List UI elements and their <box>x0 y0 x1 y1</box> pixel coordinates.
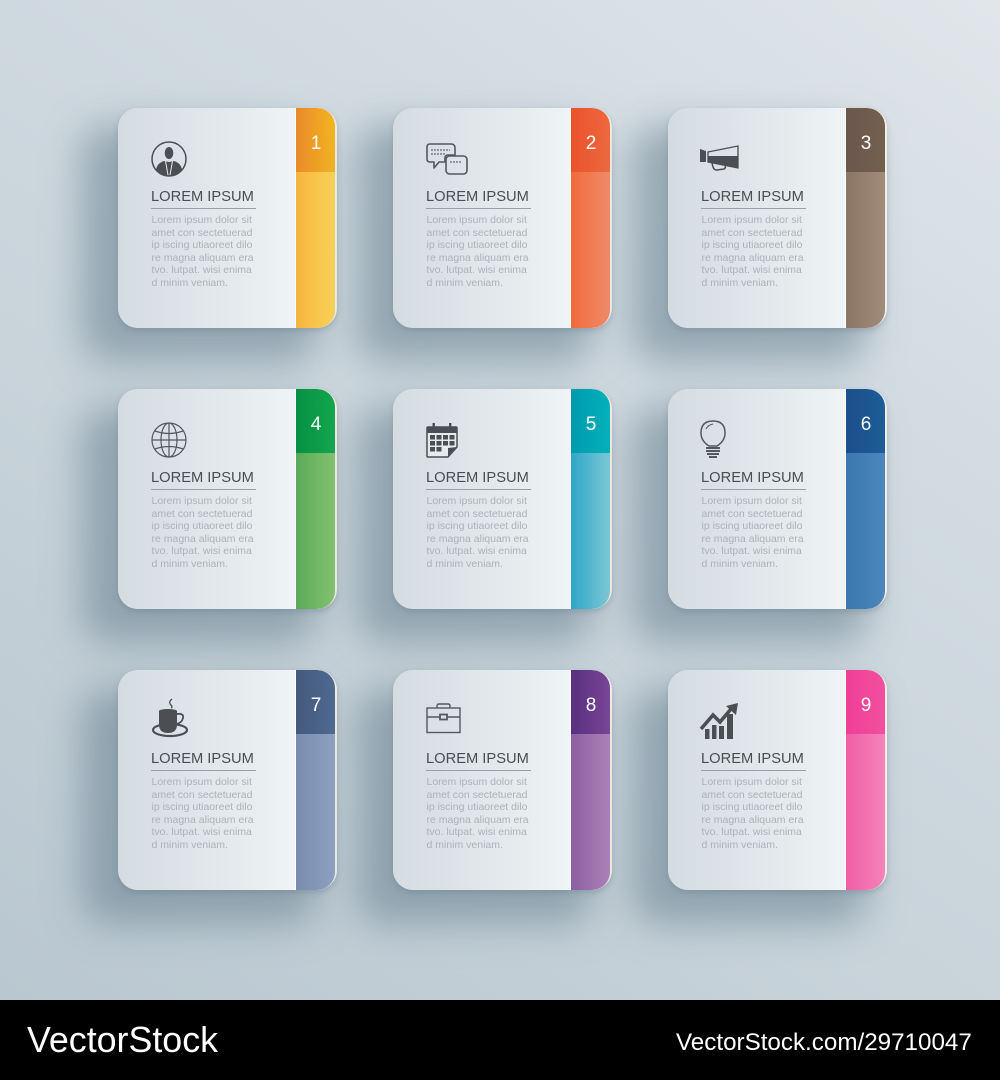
text block: Lorem ipsum dolor sit <box>426 776 527 788</box>
number 9 <box>846 670 885 734</box>
text block <box>426 776 529 850</box>
number 2 <box>571 108 610 172</box>
panel: card 3 <box>668 108 887 328</box>
text block: ip iscing utiaoreet dilo <box>426 239 527 251</box>
number 1: 1 <box>311 133 321 154</box>
text block: re magna aliquam era <box>152 532 254 544</box>
text block <box>152 776 254 850</box>
panel: card 2 <box>393 108 612 328</box>
heading: LOREM IPSUM <box>426 751 529 767</box>
text block: ip iscing utiaoreet dilo <box>702 801 802 813</box>
text block <box>702 495 804 570</box>
panel: card 6 <box>668 389 887 609</box>
icon: megaphone <box>700 145 739 171</box>
text block: d minim veniam. <box>702 838 778 850</box>
text block: d minim veniam. <box>152 276 228 288</box>
image reference: VectorStock.com/29710047 <box>676 1029 972 1056</box>
number 1 <box>296 108 335 172</box>
text block <box>426 495 529 570</box>
icon: businessman <box>151 141 187 177</box>
text block: amet con sectetuerad <box>702 788 802 800</box>
number 8 <box>571 670 610 734</box>
text block: re magna aliquam era <box>702 532 804 544</box>
number 4 <box>296 389 335 453</box>
text block: tvo. lutpat. wisi enima <box>702 545 802 557</box>
icon: growth chart <box>700 703 738 739</box>
heading: LOREM IPSUM <box>701 189 804 205</box>
text block: tvo. lutpat. wisi enima <box>426 264 527 276</box>
text block: d minim veniam. <box>152 838 228 850</box>
text block: Lorem ipsum dolor sit <box>152 495 252 507</box>
text block <box>702 776 804 850</box>
heading: LOREM IPSUM <box>151 751 254 767</box>
text block: d minim veniam. <box>426 558 503 570</box>
number 6: 6 <box>861 414 871 435</box>
number 2: 2 <box>586 133 596 154</box>
text block: ip iscing utiaoreet dilo <box>426 801 527 813</box>
text block: d minim veniam. <box>702 276 778 288</box>
text block: amet con sectetuerad <box>152 508 252 520</box>
text block: Lorem ipsum dolor sit <box>702 495 802 507</box>
icon: light bulb <box>700 420 726 458</box>
icon: globe <box>151 422 187 458</box>
number 9: 9 <box>861 695 871 716</box>
number 3 <box>846 108 885 172</box>
text block <box>702 214 804 288</box>
text block: Lorem ipsum dolor sit <box>702 214 802 226</box>
text block: amet con sectetuerad <box>702 226 802 238</box>
text block <box>152 495 254 570</box>
icon: calendar <box>426 423 458 458</box>
heading: LOREM IPSUM <box>151 470 254 486</box>
heading: LOREM IPSUM <box>151 189 254 205</box>
text block: d minim veniam. <box>152 558 228 570</box>
icon: coffee cup <box>152 698 188 738</box>
heading: LOREM IPSUM <box>701 470 804 486</box>
text block: amet con sectetuerad <box>426 788 527 800</box>
number 7: 7 <box>311 695 321 716</box>
text block: Lorem ipsum dolor sit <box>702 776 802 788</box>
text block: ip iscing utiaoreet dilo <box>702 520 802 532</box>
text block: tvo. lutpat. wisi enima <box>426 826 527 838</box>
text block: ip iscing utiaoreet dilo <box>152 520 252 532</box>
icon: briefcase <box>426 703 461 734</box>
text block: ip iscing utiaoreet dilo <box>152 801 252 813</box>
panel: card 8 <box>393 670 612 890</box>
text block: ip iscing utiaoreet dilo <box>702 239 802 251</box>
text block: d minim veniam. <box>702 558 778 570</box>
text block: amet con sectetuerad <box>152 788 252 800</box>
heading: LOREM IPSUM <box>426 189 529 205</box>
number 7 <box>296 670 335 734</box>
number 5 <box>571 389 610 453</box>
text block: tvo. lutpat. wisi enima <box>152 264 252 276</box>
number 3: 3 <box>861 133 871 154</box>
icon: chat bubbles <box>426 143 468 175</box>
number 4: 4 <box>311 414 321 435</box>
heading: LOREM IPSUM <box>426 470 529 486</box>
text block: ip iscing utiaoreet dilo <box>152 239 252 251</box>
text block <box>152 214 254 288</box>
text block: d minim veniam. <box>426 838 503 850</box>
text block: re magna aliquam era <box>702 814 804 826</box>
number 5: 5 <box>586 414 596 435</box>
text block: d minim veniam. <box>426 276 503 288</box>
text block: Lorem ipsum dolor sit <box>152 214 252 226</box>
text block: tvo. lutpat. wisi enima <box>152 545 252 557</box>
text block: Lorem ipsum dolor sit <box>152 776 252 788</box>
number 6 <box>846 389 885 453</box>
text block: Lorem ipsum dolor sit <box>426 214 527 226</box>
text block: amet con sectetuerad <box>426 508 527 520</box>
text block: amet con sectetuerad <box>702 508 802 520</box>
text block: tvo. lutpat. wisi enima <box>702 826 802 838</box>
text block: re magna aliquam era <box>702 252 804 264</box>
text block: re magna aliquam era <box>152 814 254 826</box>
text block: ip iscing utiaoreet dilo <box>426 520 527 532</box>
text block: re magna aliquam era <box>152 252 254 264</box>
panel: card 5 <box>393 389 612 609</box>
text block: re magna aliquam era <box>426 532 529 544</box>
text block: tvo. lutpat. wisi enima <box>702 264 802 276</box>
text block: amet con sectetuerad <box>152 226 252 238</box>
text block <box>426 214 529 288</box>
text block: re magna aliquam era <box>426 814 529 826</box>
logo text: VectorStock <box>27 1020 218 1060</box>
footer: watermark bar <box>0 1000 1000 1080</box>
text block: tvo. lutpat. wisi enima <box>152 826 252 838</box>
text block: tvo. lutpat. wisi enima <box>426 545 527 557</box>
text block: Lorem ipsum dolor sit <box>426 495 527 507</box>
heading: LOREM IPSUM <box>701 751 804 767</box>
panel: card 9 <box>668 670 887 890</box>
panel: card 4 <box>118 389 337 609</box>
panel: card 7 <box>118 670 337 890</box>
text block: amet con sectetuerad <box>426 226 527 238</box>
number 8: 8 <box>586 695 596 716</box>
text block: re magna aliquam era <box>426 252 529 264</box>
panel: card 1 <box>118 108 337 328</box>
